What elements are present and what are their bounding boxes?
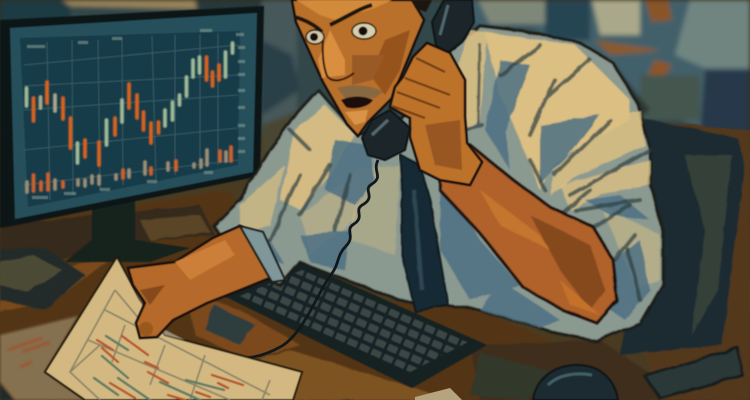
hair <box>412 0 432 12</box>
brows <box>295 5 372 32</box>
shirt highlights <box>240 30 660 290</box>
shirt shadows <box>245 60 650 328</box>
paper chart strokes <box>94 336 243 400</box>
monitor bezel <box>0 6 264 228</box>
monitor screen <box>20 31 240 207</box>
shirt body <box>214 26 663 341</box>
small paper at bottom <box>415 388 462 400</box>
face <box>292 0 424 136</box>
monitor <box>0 6 264 262</box>
chart grid <box>24 33 238 200</box>
shirt <box>214 26 663 341</box>
chair armrest <box>645 348 742 398</box>
keyboard <box>222 262 487 388</box>
mouth <box>341 97 373 108</box>
bezel labels <box>27 29 245 199</box>
right eye <box>352 23 376 39</box>
left cuff <box>240 226 285 282</box>
desk <box>0 190 690 400</box>
candlesticks <box>26 43 232 192</box>
main paper <box>45 257 302 400</box>
phone earpiece <box>432 0 474 55</box>
secondary paper <box>0 316 85 400</box>
moustache <box>337 85 383 98</box>
left arm and hand <box>128 226 272 338</box>
paper shadow <box>128 270 185 340</box>
monitor stand <box>65 200 190 262</box>
computer mouse <box>533 365 618 400</box>
phone cord <box>242 160 378 358</box>
left desk clutter <box>0 248 85 310</box>
paper grid <box>70 290 270 400</box>
head <box>292 0 432 136</box>
right wall and chair <box>620 118 750 400</box>
phone mouthpiece <box>362 110 410 160</box>
left eye <box>306 30 324 44</box>
nose <box>323 40 354 80</box>
necktie <box>400 155 448 312</box>
hand holding phone <box>390 43 482 185</box>
volume bars <box>34 147 231 191</box>
forearm <box>440 145 617 323</box>
